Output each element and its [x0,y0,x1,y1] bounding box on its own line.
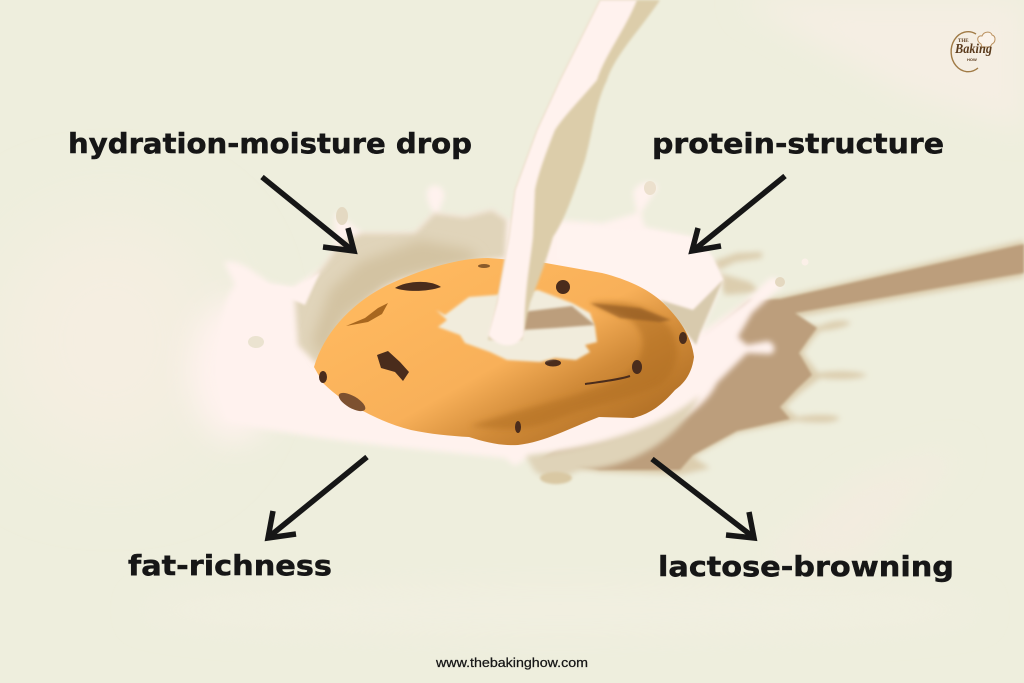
deep shading by cookie top-left [312,240,480,360]
logo: The Baking How [951,32,995,72]
tan droplets beside the splash [712,252,762,295]
chip top left [395,282,441,291]
label: protein-structure: protein-structure [652,127,944,160]
chip centre left [377,351,409,381]
label: lactose-browning: lactose-browning [658,550,954,583]
milk stream [488,0,660,345]
crown base [218,182,782,466]
tan tips [775,277,785,287]
logo: The Baking How: THE [958,39,969,44]
tan inner crown left [295,210,507,365]
cookie [314,258,694,445]
label: fat-richness: fat-richness [128,549,332,582]
shadow of stream on cookie [522,306,595,330]
lower tan rim [526,395,700,482]
arrow: hydration-moisture drop [262,177,354,251]
top right white lobe [556,225,723,310]
logo: The Baking How: Baking [954,42,992,57]
chip top right [556,280,570,294]
shadow of milk stream and splash on the surface [540,240,1024,475]
website footer: www.thebakinghow.com [435,655,588,670]
sliver [346,303,388,326]
logo: The Baking How: HOW [967,57,977,62]
arrow: fat-richness [268,457,367,538]
left pink splash lobe [240,272,320,305]
arrow: protein-structure [692,176,785,251]
chocolate chips [319,264,687,433]
tan wedge right of cookie [660,280,723,345]
label: hydration-moisture drop: hydration-moisture drop [68,127,472,160]
cookie darker band [470,301,677,429]
milk splash crown [190,181,808,484]
arrow: lactose-browning [652,459,754,538]
milk pool on cookie [436,290,597,362]
soft pale fade on left [190,300,280,440]
